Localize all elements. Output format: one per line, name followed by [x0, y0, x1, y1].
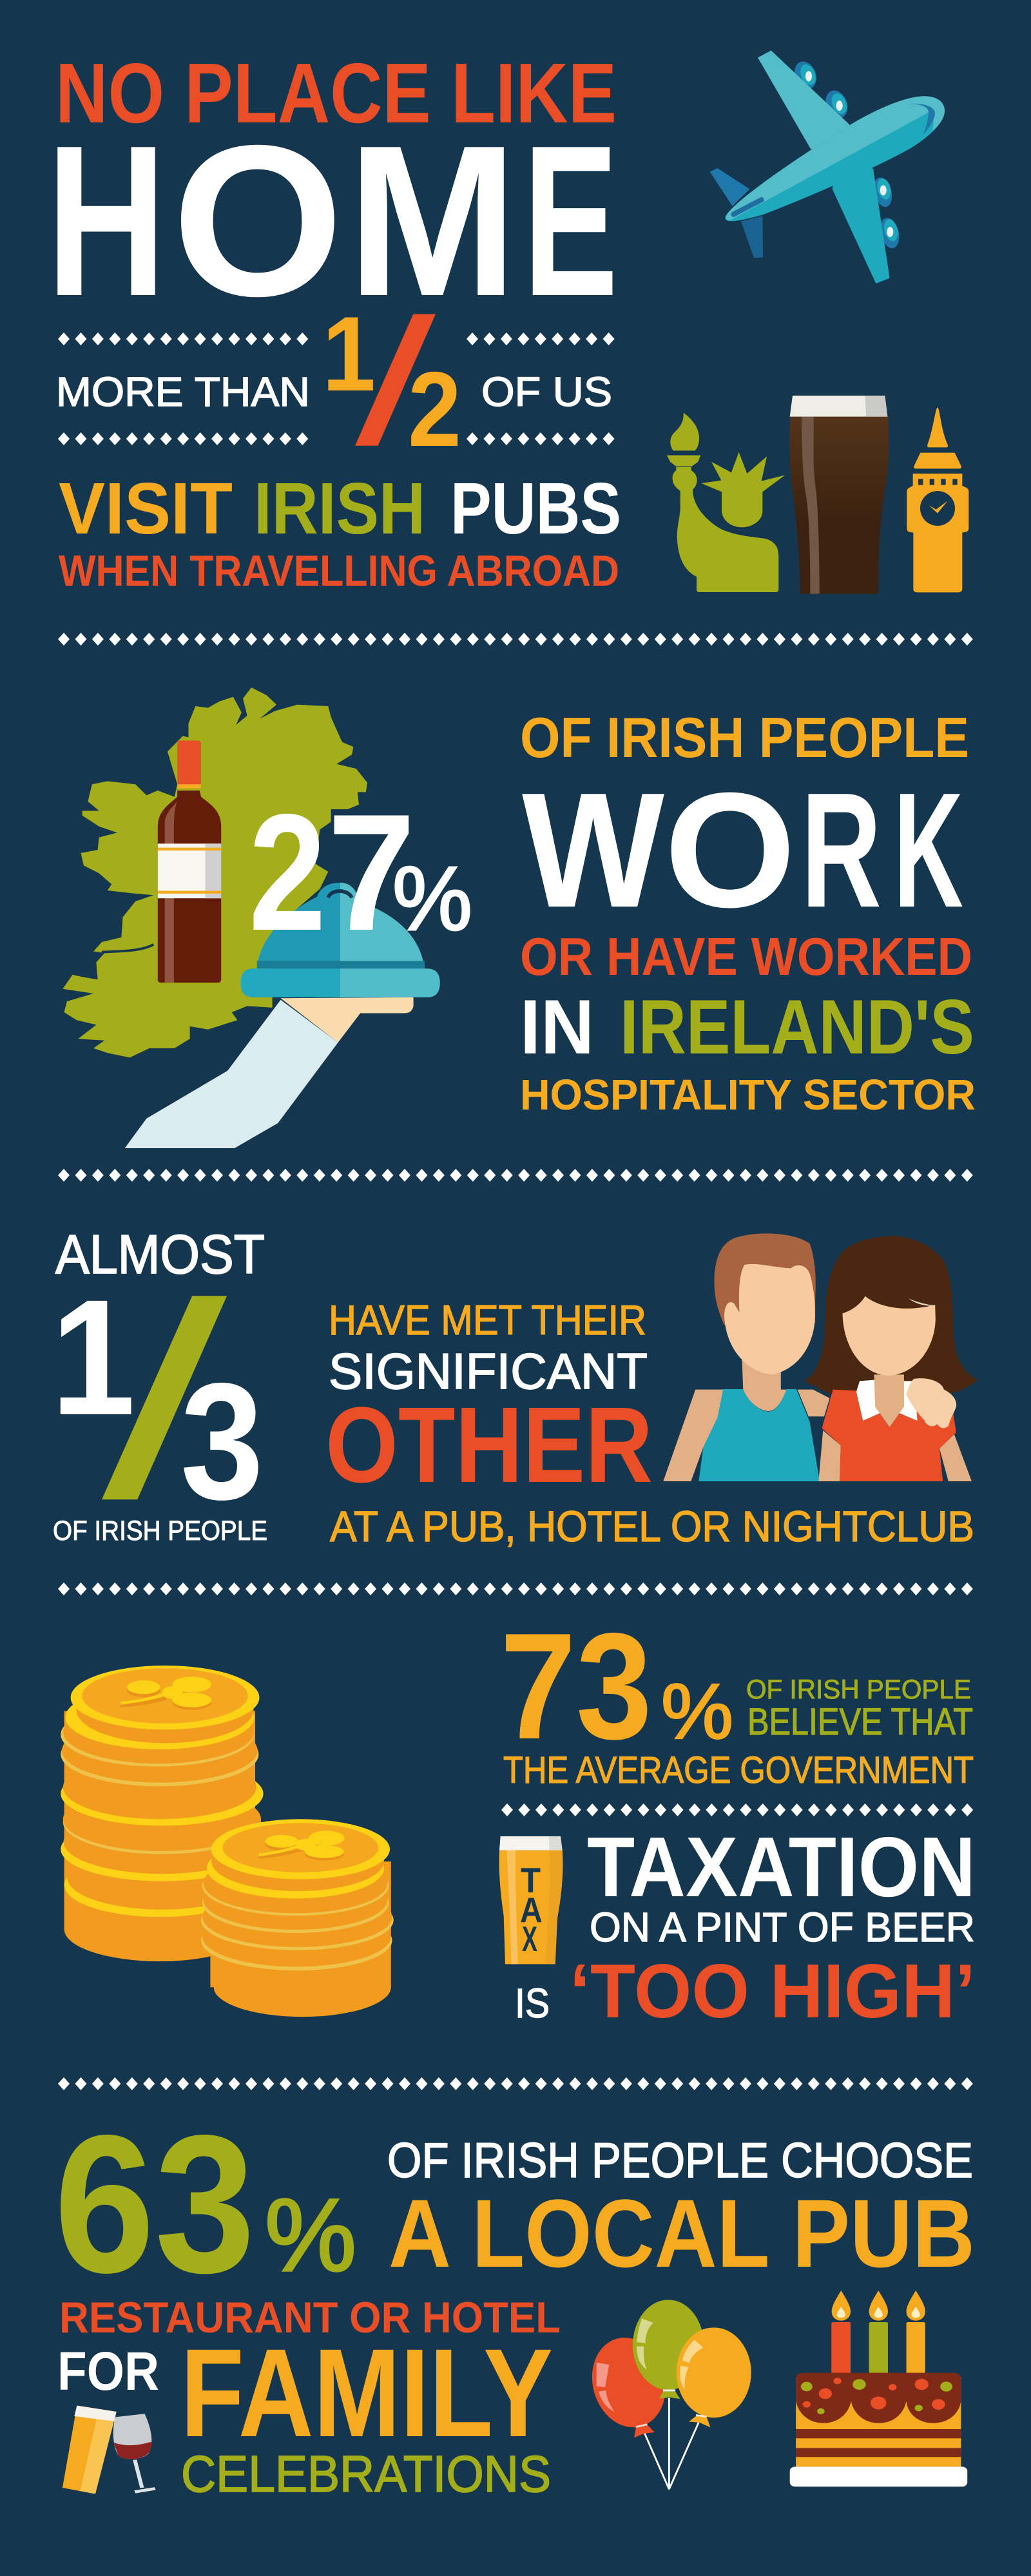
small coin stack [201, 1819, 394, 2017]
icon: pint of stout [789, 396, 889, 594]
text: at a pub hotel or nightclub: AT A PUB, HOTEL OR NIGHTCLUB [330, 1503, 974, 1551]
title: home: O [172, 101, 343, 341]
title line: no place like: NO PLACE LIKE [55, 46, 617, 140]
text: too high: ‘TOO HIGH’ [570, 1948, 976, 2034]
text: hospitality sector: HOSPITALITY SECTOR [520, 1071, 976, 1119]
text: have met their: HAVE MET THEIR [329, 1296, 646, 1343]
fraction: one third: 1 [51, 1265, 135, 1450]
text: in ireland's: IN [520, 984, 594, 1070]
text: of irish people: OF IRISH PEOPLE [53, 1515, 267, 1546]
heading: taxation: TAXATION [587, 1820, 976, 1914]
icon: birthday cake [790, 2291, 967, 2486]
title: home: E [523, 101, 618, 341]
icon: couple [663, 1233, 978, 1481]
fraction: one half: 2 [408, 350, 461, 468]
text: celebrations: CELEBRATIONS [181, 2445, 551, 2503]
divider [55, 1582, 976, 1595]
stat: 73 percent: 73 [500, 1601, 652, 1771]
text: believe that: BELIEVE THAT [747, 1701, 973, 1743]
stat: 63 percent: 63 [54, 2094, 255, 2314]
text: a local pub: A LOCAL PUB [389, 2179, 975, 2287]
heading: work: W [522, 758, 664, 941]
icon: tax beer glass: X [522, 1919, 537, 1959]
fraction: one third: / [102, 1247, 228, 1556]
stat: 27 percent: % [392, 847, 472, 949]
icon: map of ireland [63, 687, 367, 1057]
large coin stack [61, 1666, 264, 1961]
text: on a pint of beer: ON A PINT OF BEER [590, 1904, 975, 1950]
text: of irish people: OF IRISH PEOPLE [520, 706, 969, 769]
divider [55, 633, 976, 646]
panel: family celebrations [54, 2094, 975, 2503]
heading: other: OTHER [325, 1385, 653, 1505]
divider [464, 332, 617, 345]
heading: work: K [894, 758, 963, 941]
icon: waiter arm with cloche [125, 883, 440, 1148]
divider [55, 432, 311, 445]
text: of irish people choose: OF IRISH PEOPLE CHOOSE [387, 2133, 973, 2188]
divider [55, 332, 311, 345]
fraction: one half: / [355, 282, 437, 482]
title: home: H [46, 101, 166, 341]
text: of irish people: OF IRISH PEOPLE [746, 1674, 971, 1704]
text: the average government: THE AVERAGE GOVERNMENT [503, 1749, 974, 1791]
text: when travelling abroad: WHEN TRAVELLING ABROAD [59, 546, 619, 595]
stat: 63 percent: % [265, 2177, 356, 2292]
heading: family: FAMILY [180, 2323, 553, 2463]
icon: beer and wine glasses [63, 2405, 155, 2494]
icon: balloons [585, 2300, 751, 2489]
icon: wine bottle [158, 740, 221, 983]
panel: taxation [61, 1601, 976, 2034]
text: visit irish pubs: IRISH [254, 468, 425, 549]
fraction: one third [51, 1247, 264, 1556]
text: more than: MORE THAN [56, 369, 310, 415]
text: almost: ALMOST [55, 1224, 265, 1285]
icon: gold coins [61, 1666, 394, 2017]
icon: tax beer glass: A [520, 1890, 542, 1930]
stat: 27 percent: 2 [249, 779, 326, 965]
icon: big ben [907, 407, 968, 592]
icon: airplane [710, 50, 945, 284]
divider [499, 1803, 976, 1816]
text: is: IS [515, 1980, 550, 2026]
panel: significant other [51, 1224, 978, 1556]
text: of us: OF US [481, 369, 612, 415]
divider [55, 1169, 976, 1182]
stat: 73 percent: % [661, 1668, 733, 1755]
fraction: one half [322, 282, 461, 482]
stat: 27 percent [249, 779, 472, 965]
fraction: one third: 3 [180, 1348, 264, 1534]
text: for: FOR [57, 2341, 159, 2401]
text: in ireland's: IRELAND'S [620, 984, 974, 1070]
icon: tax beer glass: T [521, 1860, 541, 1900]
text: restaurant or hotel: RESTAURANT OR HOTEL [59, 2293, 561, 2342]
heading: work: R [801, 758, 882, 941]
panel: hospitality [63, 687, 976, 1148]
text: significant: SIGNIFICANT [329, 1343, 648, 1399]
panel: no place like home [46, 46, 968, 595]
fraction: one half: 1 [322, 294, 376, 413]
title: home: M [347, 101, 517, 341]
text: or have worked: OR HAVE WORKED [520, 927, 972, 986]
text: visit irish pubs: PUBS [450, 468, 621, 549]
icon: tax beer glass [499, 1836, 563, 1964]
stat: 27 percent: 7 [327, 779, 416, 965]
text: visit irish pubs: VISIT [59, 468, 233, 549]
divider [55, 2077, 976, 2090]
icon: statue of liberty [667, 413, 785, 592]
divider [464, 432, 617, 445]
heading: work: O [664, 758, 796, 941]
